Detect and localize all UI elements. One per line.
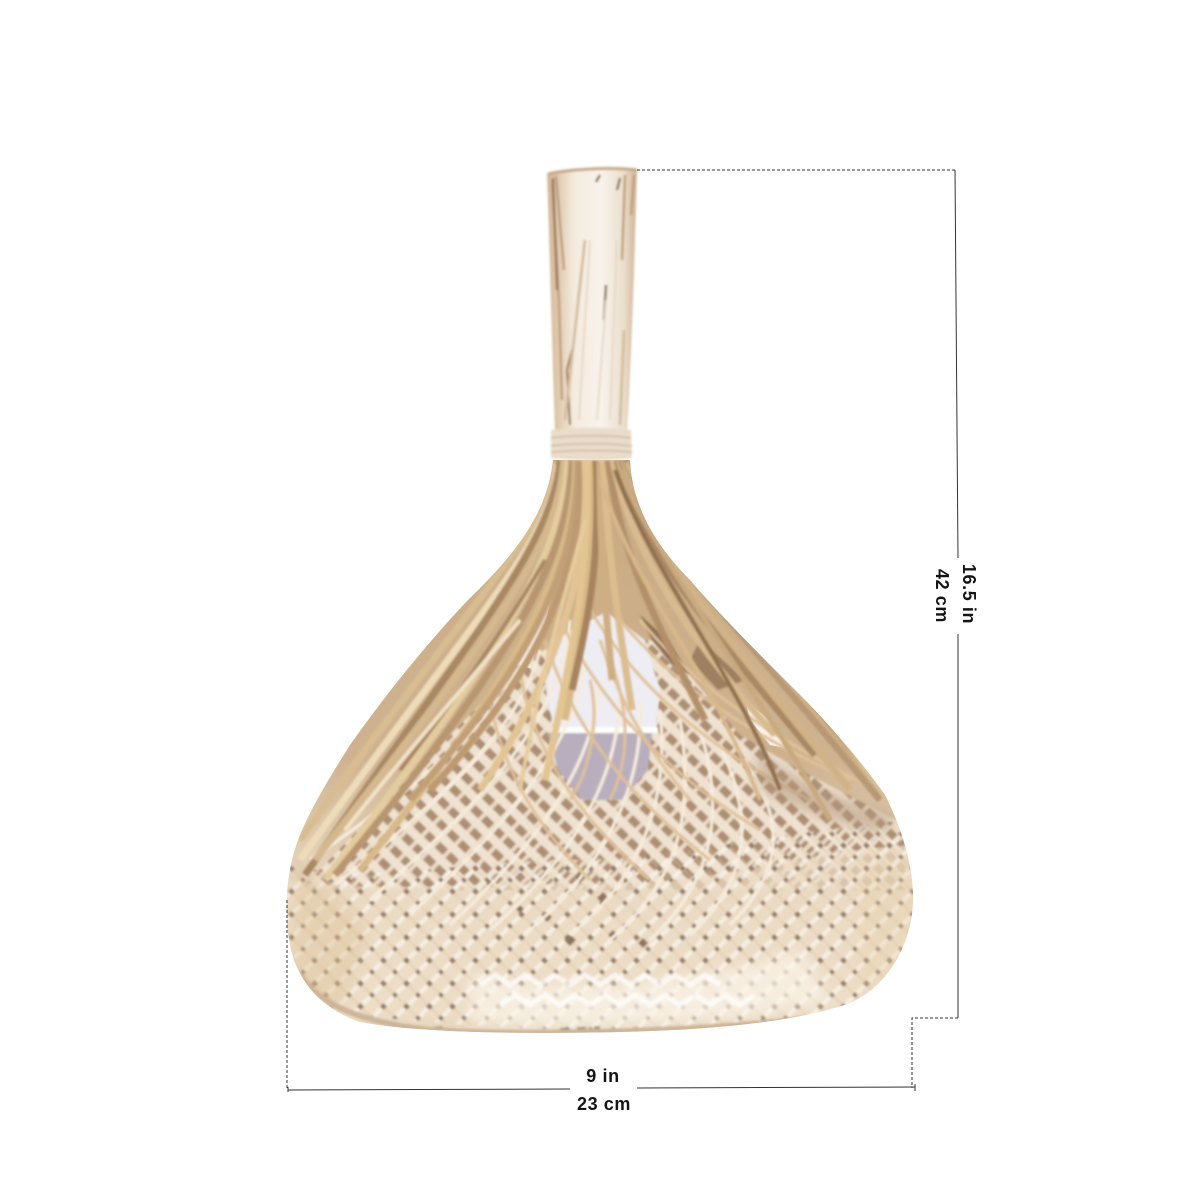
lamp neck: bundled bamboo strips — [547, 168, 637, 432]
lamp shade body — [270, 450, 930, 1050]
width label — [577, 1066, 631, 1114]
light bulb inside shade — [546, 612, 660, 800]
height dimension line — [637, 170, 958, 1088]
woven lower basket — [285, 820, 915, 1040]
height label — [932, 564, 979, 624]
width label: 9 in — [586, 1066, 620, 1086]
lamp illustration — [270, 168, 930, 1050]
larger woven gaps — [486, 871, 648, 948]
outer fan strands, left and right — [300, 460, 895, 880]
binding band around the neck — [551, 428, 632, 460]
brown ridge of the right swirl — [755, 750, 895, 832]
lattice zone around the bulb — [300, 640, 905, 890]
height label: 42 cm — [932, 569, 952, 623]
white gaps behind strands — [516, 602, 550, 668]
width label: 23 cm — [577, 1094, 631, 1114]
dark wedge behind strands — [640, 615, 690, 675]
swirl strands in the basket — [310, 620, 773, 940]
width dimension line — [287, 900, 915, 1092]
height label: 16.5 in — [959, 564, 979, 624]
